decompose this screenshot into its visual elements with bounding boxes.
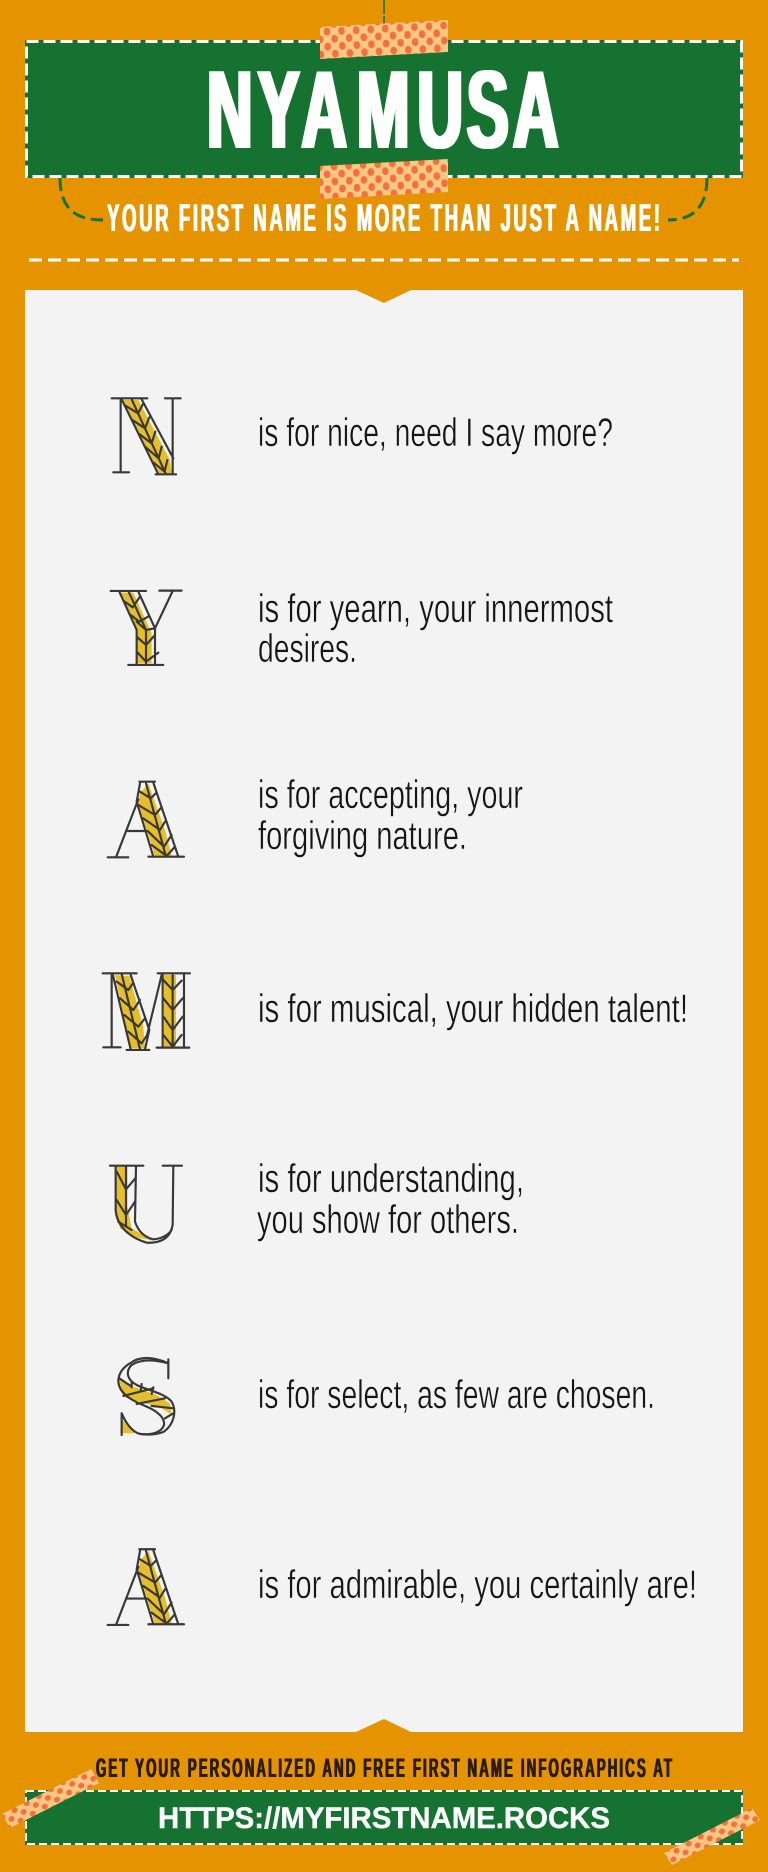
text: U: is for understanding,: [258, 1157, 524, 1201]
right dashed connector: [668, 178, 707, 220]
subtitle: YOUR FIRST NAME IS MORE THAN JUST A NAME!: [107, 197, 660, 240]
text: A: [258, 773, 523, 858]
tape: footer right: [664, 1808, 760, 1865]
letter A (second): [108, 1549, 184, 1625]
tape: footer left: [2, 1769, 99, 1828]
left dashed connector: [60, 178, 103, 220]
footer url: HTTPS://MYFIRSTNAME.ROCKS: [158, 1802, 610, 1835]
text: U: you show for others.: [257, 1198, 519, 1242]
footer call to action: GET YOUR PERSONALIZED AND FREE FIRST NAME INFOGRAPHICS AT: [96, 1754, 672, 1783]
text: Y: [258, 587, 613, 671]
footer banner: [25, 1790, 743, 1845]
tape: top of banner: [320, 20, 448, 59]
text: A: is for accepting, your: [258, 773, 523, 817]
main panel: [25, 290, 743, 1732]
tape: bottom of banner: [320, 159, 448, 199]
text: N: is for nice, need I say more?: [258, 411, 613, 455]
letter N: [112, 398, 181, 474]
white dashed divider: [29, 258, 739, 262]
letter U: [110, 1166, 182, 1243]
hanging thread: [383, 0, 385, 24]
title: NYAMUSA: [207, 48, 559, 173]
letter M: [103, 973, 190, 1050]
letter A: [108, 782, 184, 857]
title banner: [25, 40, 743, 178]
letter Y: [111, 591, 182, 665]
text: U: [257, 1157, 524, 1242]
letter S: [118, 1358, 174, 1435]
text: A: forgiving nature.: [258, 814, 467, 858]
text: Y: is for yearn, your innermost: [258, 587, 613, 631]
text: Y: desires.: [258, 627, 357, 671]
